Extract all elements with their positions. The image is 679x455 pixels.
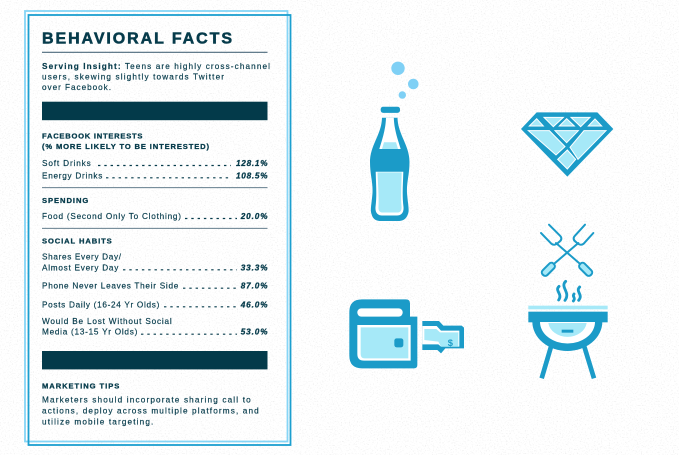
section: social habits: Almost Every Day	[42, 263, 119, 272]
section: spending	[42, 196, 268, 221]
card frame: light blue	[25, 11, 288, 442]
section: social habits: Phone Never Leaves Their Side	[42, 282, 179, 291]
section: facebook interests: FACEBOOK INTERESTS	[42, 131, 142, 140]
section: facebook interests: 128.1%	[236, 159, 268, 168]
section: spending: Food (Second Only To Clothing)	[42, 212, 181, 221]
section: facebook interests: Soft Drinks	[42, 159, 91, 168]
section: social habits: Would Be Lost Without Social	[42, 317, 172, 326]
dark bar top	[42, 102, 268, 120]
serving insight text: over Facebook.	[42, 83, 111, 92]
section: marketing tips: utilize mobile targeting.	[42, 417, 153, 426]
title: BEHAVIORAL FACTS	[42, 30, 232, 47]
serving insight text: users, skewing slightly towards Twitter	[42, 73, 224, 82]
serving insight text	[42, 62, 270, 92]
section: facebook interests: 108.5%	[236, 171, 268, 180]
card frame: dark blue	[28, 15, 290, 445]
section: marketing tips	[42, 381, 259, 426]
section: social habits: SOCIAL HABITS	[42, 237, 112, 246]
section: social habits: 53.0%	[241, 328, 268, 337]
serving insight text: Serving Insight: Teens are highly cross-channel	[42, 62, 270, 71]
section: facebook interests: Energy Drinks	[42, 171, 102, 180]
icon: crossed forks	[541, 225, 593, 277]
section: social habits	[42, 237, 268, 337]
icon: diamond	[521, 112, 613, 177]
smoke	[558, 281, 580, 301]
section: facebook interests	[42, 131, 268, 180]
section: social habits: Posts Daily (16-24 Yr Olds)	[42, 300, 160, 309]
section: spending: 20.0%	[240, 212, 268, 221]
section: facebook interests: (% MORE LIKELY TO BE INTERESTED)	[42, 142, 209, 151]
section: social habits: Shares Every Day/	[42, 253, 122, 262]
section: marketing tips: Marketers should incorporate sharing call to	[42, 396, 251, 405]
section: social habits: 87.0%	[241, 282, 268, 291]
section: marketing tips: actions, deploy across multiple platforms, and	[42, 406, 259, 415]
dark bar bottom	[42, 351, 268, 369]
section: social habits: 46.0%	[240, 300, 268, 309]
icon: grill	[528, 281, 608, 378]
icon: wallet with dollar bill: $	[448, 338, 454, 348]
section: social habits: 33.3%	[241, 263, 268, 272]
icon: wallet with dollar bill	[349, 299, 464, 368]
panel: behavioral facts card	[25, 11, 290, 445]
icon: soda bottle	[370, 62, 419, 221]
section: marketing tips: MARKETING TIPS	[42, 381, 119, 390]
section: spending: SPENDING	[42, 196, 88, 205]
section: social habits: Media (13-15 Yr Olds)	[42, 328, 138, 337]
